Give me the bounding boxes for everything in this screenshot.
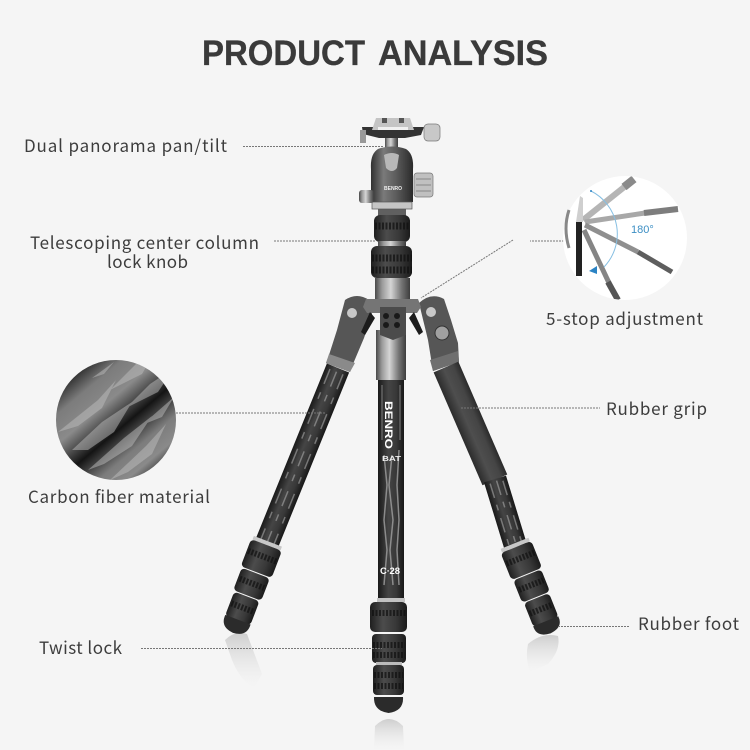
label: rubber foot: Rubber foot (638, 610, 740, 635)
title: ANALYSIS (378, 34, 548, 73)
label: twist lock: Twist lock (39, 634, 123, 659)
upper column knobs (378, 208, 406, 216)
label: rubber grip: Rubber grip (606, 395, 707, 420)
hub (363, 299, 421, 313)
label: carbon fiber material: Carbon fiber material (28, 483, 210, 508)
right leg (419, 296, 566, 639)
center twist locks (377, 598, 405, 602)
center column metal (376, 330, 406, 380)
center column markings: BENRO (382, 401, 394, 450)
label: 5-stop adjustment: 5-stop adjustment (546, 305, 704, 330)
center carbon column (378, 380, 404, 602)
inset: 5-stop adjustment (563, 176, 687, 300)
leader lines (141, 146, 630, 648)
label: center column lock knob (30, 229, 259, 273)
tripod: BAT (382, 456, 402, 463)
ball head (385, 137, 398, 149)
label: center column lock knob: lock knob (107, 248, 188, 273)
title: PRODUCT (202, 34, 365, 73)
floor reflections of the tripod feet (225, 633, 559, 750)
label: dual panorama: Dual panorama pan/tilt (24, 132, 228, 157)
label: center column lock knob: Telescoping center column (30, 229, 259, 254)
tripod: C∙28 (380, 566, 400, 576)
tripod: BENRO (384, 186, 402, 192)
left leg (218, 296, 372, 639)
title (202, 34, 548, 73)
quick release plate (362, 127, 424, 138)
inset: 5-stop adjustment: 180° (631, 224, 654, 236)
tripod (218, 118, 566, 713)
inset: carbon fiber swatch (56, 350, 176, 480)
